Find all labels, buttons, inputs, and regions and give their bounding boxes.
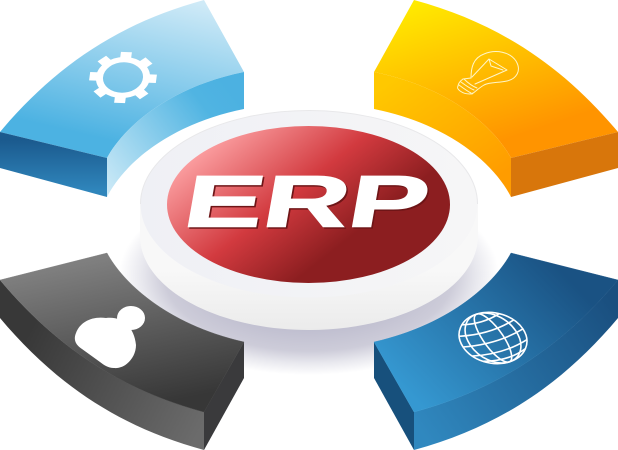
button side wall xyxy=(140,204,478,330)
gear segment front wall xyxy=(0,132,107,197)
button top face xyxy=(140,110,478,298)
panel: lightbulb segment xyxy=(374,0,618,197)
panel: person segment xyxy=(0,253,244,450)
icon: gear xyxy=(88,52,158,103)
icon: globe xyxy=(447,305,539,371)
panel: globe segment xyxy=(374,253,618,450)
button red face xyxy=(167,126,450,283)
title: ERP xyxy=(178,161,436,242)
person segment outer wall xyxy=(0,280,204,450)
gear segment top face xyxy=(0,0,244,158)
globe segment outer wall xyxy=(414,280,618,450)
icon: person xyxy=(75,306,145,368)
person segment right wall xyxy=(204,342,244,450)
person segment top face xyxy=(0,253,244,412)
globe segment top face xyxy=(374,253,618,412)
lightbulb segment top face xyxy=(374,0,618,158)
button rim highlight xyxy=(140,111,478,204)
lightbulb segment front wall xyxy=(511,132,618,197)
panel: gear segment xyxy=(0,0,244,197)
panel: central ERP button xyxy=(140,110,478,330)
disc shadow xyxy=(119,175,499,375)
globe segment left wall xyxy=(374,342,414,450)
title shadow: ERP xyxy=(180,162,437,244)
gear segment inner wall xyxy=(107,72,244,197)
lightbulb segment inner wall xyxy=(374,72,511,197)
icon: lightbulb xyxy=(458,52,518,94)
